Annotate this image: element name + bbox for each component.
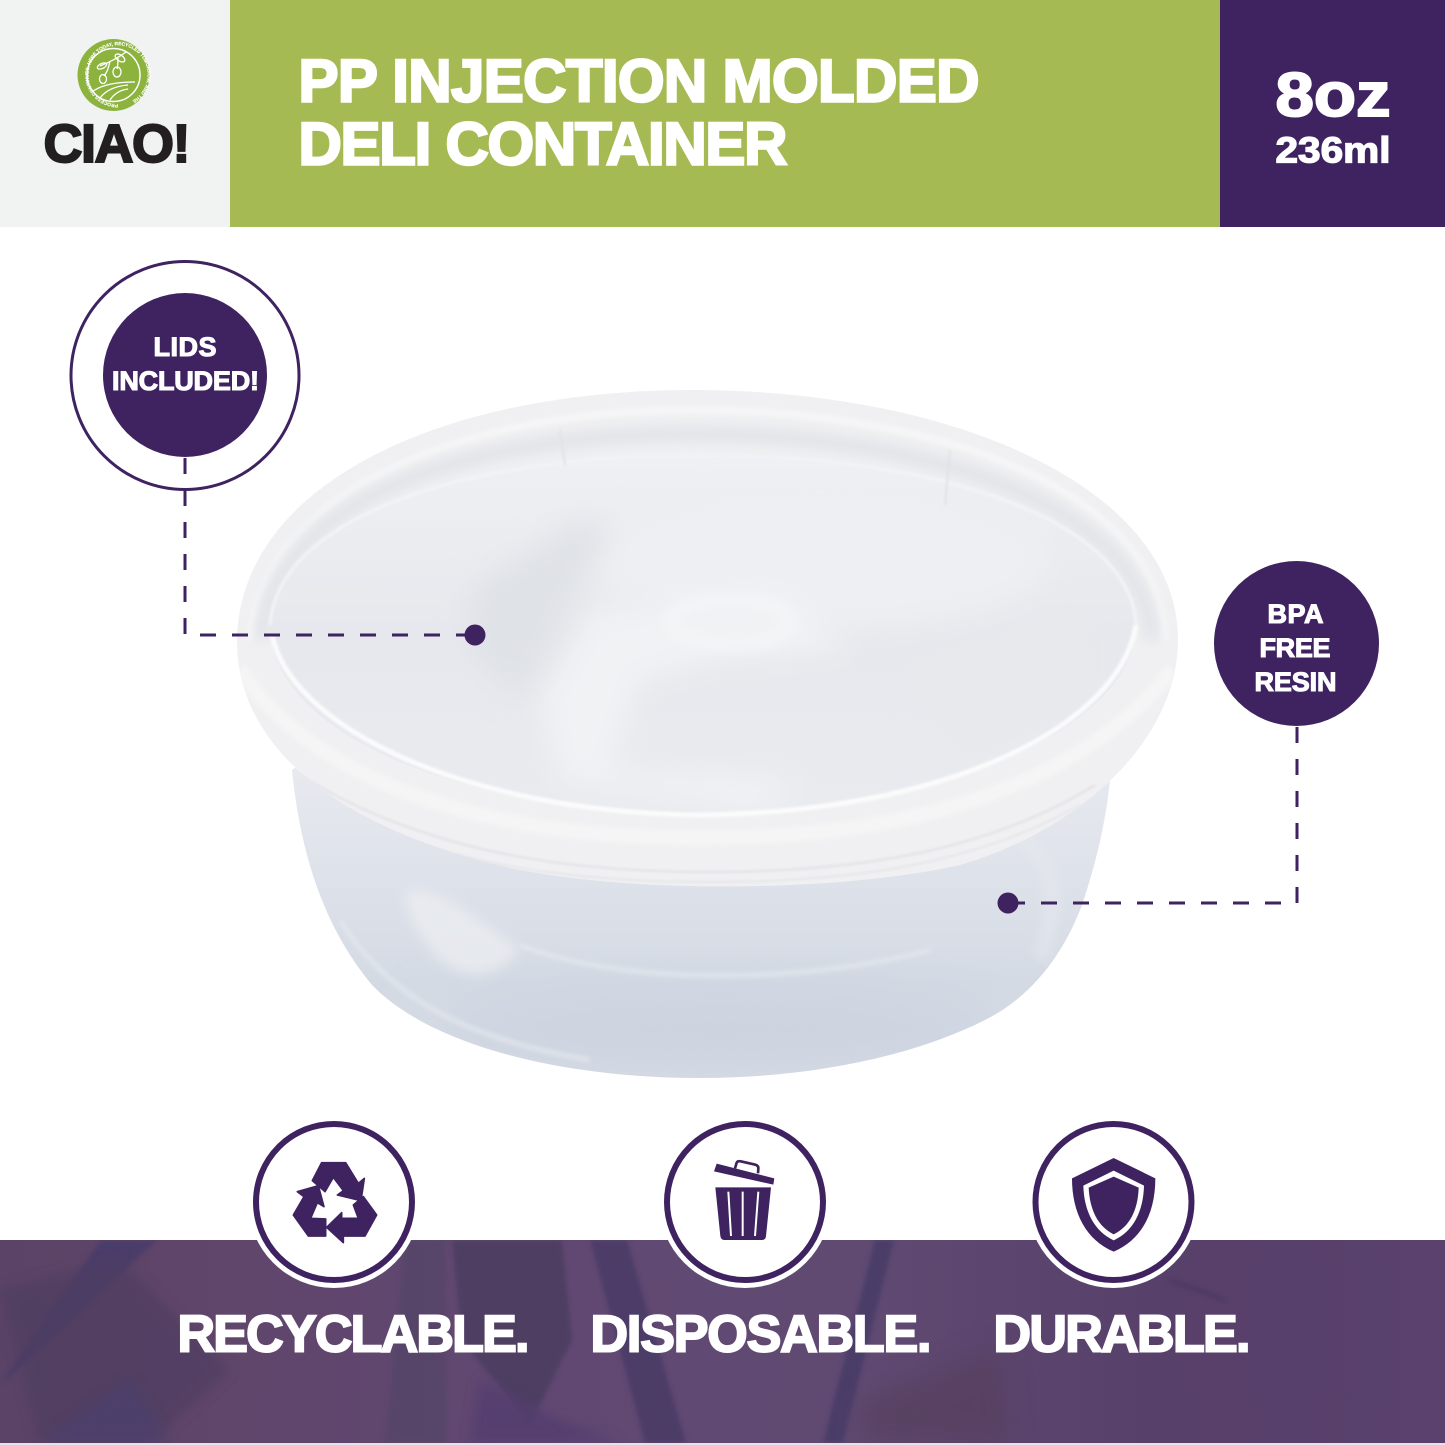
- header: green title panel: [230, 0, 1220, 227]
- size text: 236ml: [1276, 130, 1390, 170]
- feature: recyclable: [178, 1116, 530, 1364]
- header: logo panel: [0, 0, 230, 227]
- container body: [292, 768, 1110, 1078]
- logo badge: PROCESS CONTINUES. HERE TODAY, RECYCLED TOMORROW. AND THE: [85, 42, 151, 108]
- badge disc: [103, 293, 267, 457]
- container lid surface: [270, 430, 1136, 815]
- icon: shield: [1072, 1158, 1155, 1252]
- badge text: [112, 332, 259, 396]
- badge: recyclable: [248, 1116, 420, 1288]
- leader line: lids: [185, 458, 486, 646]
- badge text: [1254, 599, 1336, 697]
- badge text: RESIN: [1254, 667, 1336, 697]
- badge text: LIDS: [154, 332, 216, 362]
- feature: durable: [994, 1116, 1250, 1364]
- icon: recycle: [293, 1163, 377, 1243]
- badge text: FREE: [1260, 633, 1330, 663]
- leaf pattern: [0, 1240, 1225, 1443]
- badge ring: [71, 262, 299, 490]
- logo wordmark: CIAO!: [44, 114, 190, 174]
- feature: disposable: [590, 1116, 932, 1364]
- label: recyclable: RECYCLABLE.: [178, 1306, 530, 1364]
- title: DELI CONTAINER: [298, 110, 788, 178]
- footer bottom edge: [0, 1443, 1445, 1445]
- product photo: deli container: [237, 390, 1178, 1078]
- header: size panel: [1220, 0, 1445, 227]
- leader line: bpa: [998, 727, 1297, 914]
- badge: disposable: [659, 1116, 831, 1288]
- badge disc: [1214, 561, 1379, 726]
- size text: [1276, 61, 1390, 170]
- badge text: INCLUDED!: [112, 366, 259, 396]
- footer band: [0, 1240, 1445, 1445]
- badge text: BPA: [1268, 599, 1324, 629]
- title: [298, 48, 980, 178]
- callout: bpa free resin: [998, 561, 1379, 914]
- size text: 8oz: [1276, 61, 1390, 130]
- badge: durable: [1028, 1116, 1200, 1288]
- icon: trash can: [714, 1161, 774, 1240]
- label: disposable: DISPOSABLE.: [590, 1306, 932, 1364]
- callout: lids included: [71, 262, 486, 646]
- label: durable: DURABLE.: [994, 1306, 1250, 1364]
- title: PP INJECTION MOLDED: [298, 48, 980, 114]
- container lid rim: [237, 390, 1178, 886]
